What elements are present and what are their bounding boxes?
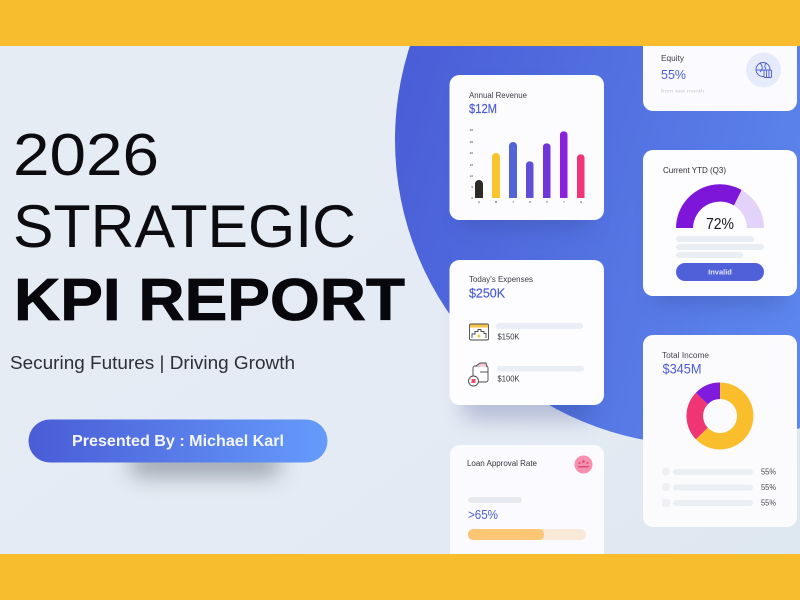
placeholder line — [468, 497, 522, 503]
panel: annual revenue — [450, 75, 604, 220]
revenue heading: Annual Revenue — [469, 91, 528, 100]
bar chart: 25 — [470, 140, 473, 144]
bar chart: 10 — [470, 174, 473, 178]
legend rows — [662, 468, 776, 508]
title: KPI REPORT — [14, 267, 405, 333]
expense bar 1 — [496, 323, 583, 329]
presenter button: Presented By : Michael Karl — [72, 433, 284, 450]
panel: current ytd — [643, 150, 797, 296]
donut chart — [686, 382, 753, 450]
expense bar 2 — [497, 366, 584, 372]
bar chart: M — [495, 200, 498, 204]
bar chart: A — [478, 200, 480, 204]
expenses heading: Today's Expenses — [469, 275, 533, 284]
panel: loan approval rate — [450, 445, 604, 570]
income value: $345M — [662, 362, 702, 376]
bar chart — [470, 128, 584, 204]
top yellow band — [0, 0, 800, 46]
bar chart: 5 — [471, 185, 473, 189]
panel: today's expenses — [450, 260, 604, 405]
revenue value: $12M — [469, 101, 497, 116]
bar chart: X — [546, 200, 548, 204]
expense amount 2: $100K — [498, 374, 520, 384]
bar chart: G — [580, 200, 583, 204]
bar chart: 20 — [470, 151, 473, 155]
bar chart: Y — [563, 200, 565, 204]
bar chart: O — [529, 200, 532, 204]
title — [13, 122, 405, 333]
panel: equity — [643, 30, 797, 111]
gauge value: 72% — [706, 216, 734, 233]
icon: folder lock — [468, 363, 488, 386]
bar chart: 0 — [471, 196, 473, 200]
loan heading: Loan Approval Rate — [467, 459, 538, 468]
equity value: 55% — [661, 67, 686, 82]
bottom yellow band — [0, 554, 800, 600]
panel: total income — [643, 335, 797, 527]
ytd heading: Current YTD (Q3) — [663, 166, 726, 175]
card shadows — [462, 90, 785, 420]
icon: people badge — [574, 456, 592, 474]
gauge chart — [676, 184, 764, 228]
presenter button — [28, 420, 328, 462]
legend rows: 55% — [761, 483, 776, 492]
expense amount 1: $150K — [498, 332, 520, 342]
legend rows: 55% — [761, 468, 776, 476]
bar chart: 30 — [470, 128, 473, 132]
income heading: Total Income — [662, 351, 710, 360]
button shadow — [130, 452, 280, 476]
expenses value: $250K — [469, 286, 505, 300]
invalid button — [676, 263, 764, 281]
icon: browser chart — [470, 324, 488, 340]
title: STRATEGIC — [13, 193, 356, 260]
bar chart: J — [512, 200, 514, 204]
loan value: >65% — [468, 508, 498, 522]
equity heading: Equity — [661, 54, 684, 63]
placeholder lines — [676, 236, 764, 258]
equity note: from last month — [661, 88, 705, 94]
progress bar — [468, 529, 586, 540]
subtitle: Securing Futures | Driving Growth — [10, 352, 295, 373]
title: 2026 — [13, 122, 159, 188]
invalid button: Invalid — [708, 268, 732, 276]
icon: globe chart — [746, 52, 781, 88]
bar chart: 15 — [470, 163, 473, 167]
blue circle backdrop — [395, 0, 800, 445]
legend rows: 55% — [761, 498, 776, 508]
